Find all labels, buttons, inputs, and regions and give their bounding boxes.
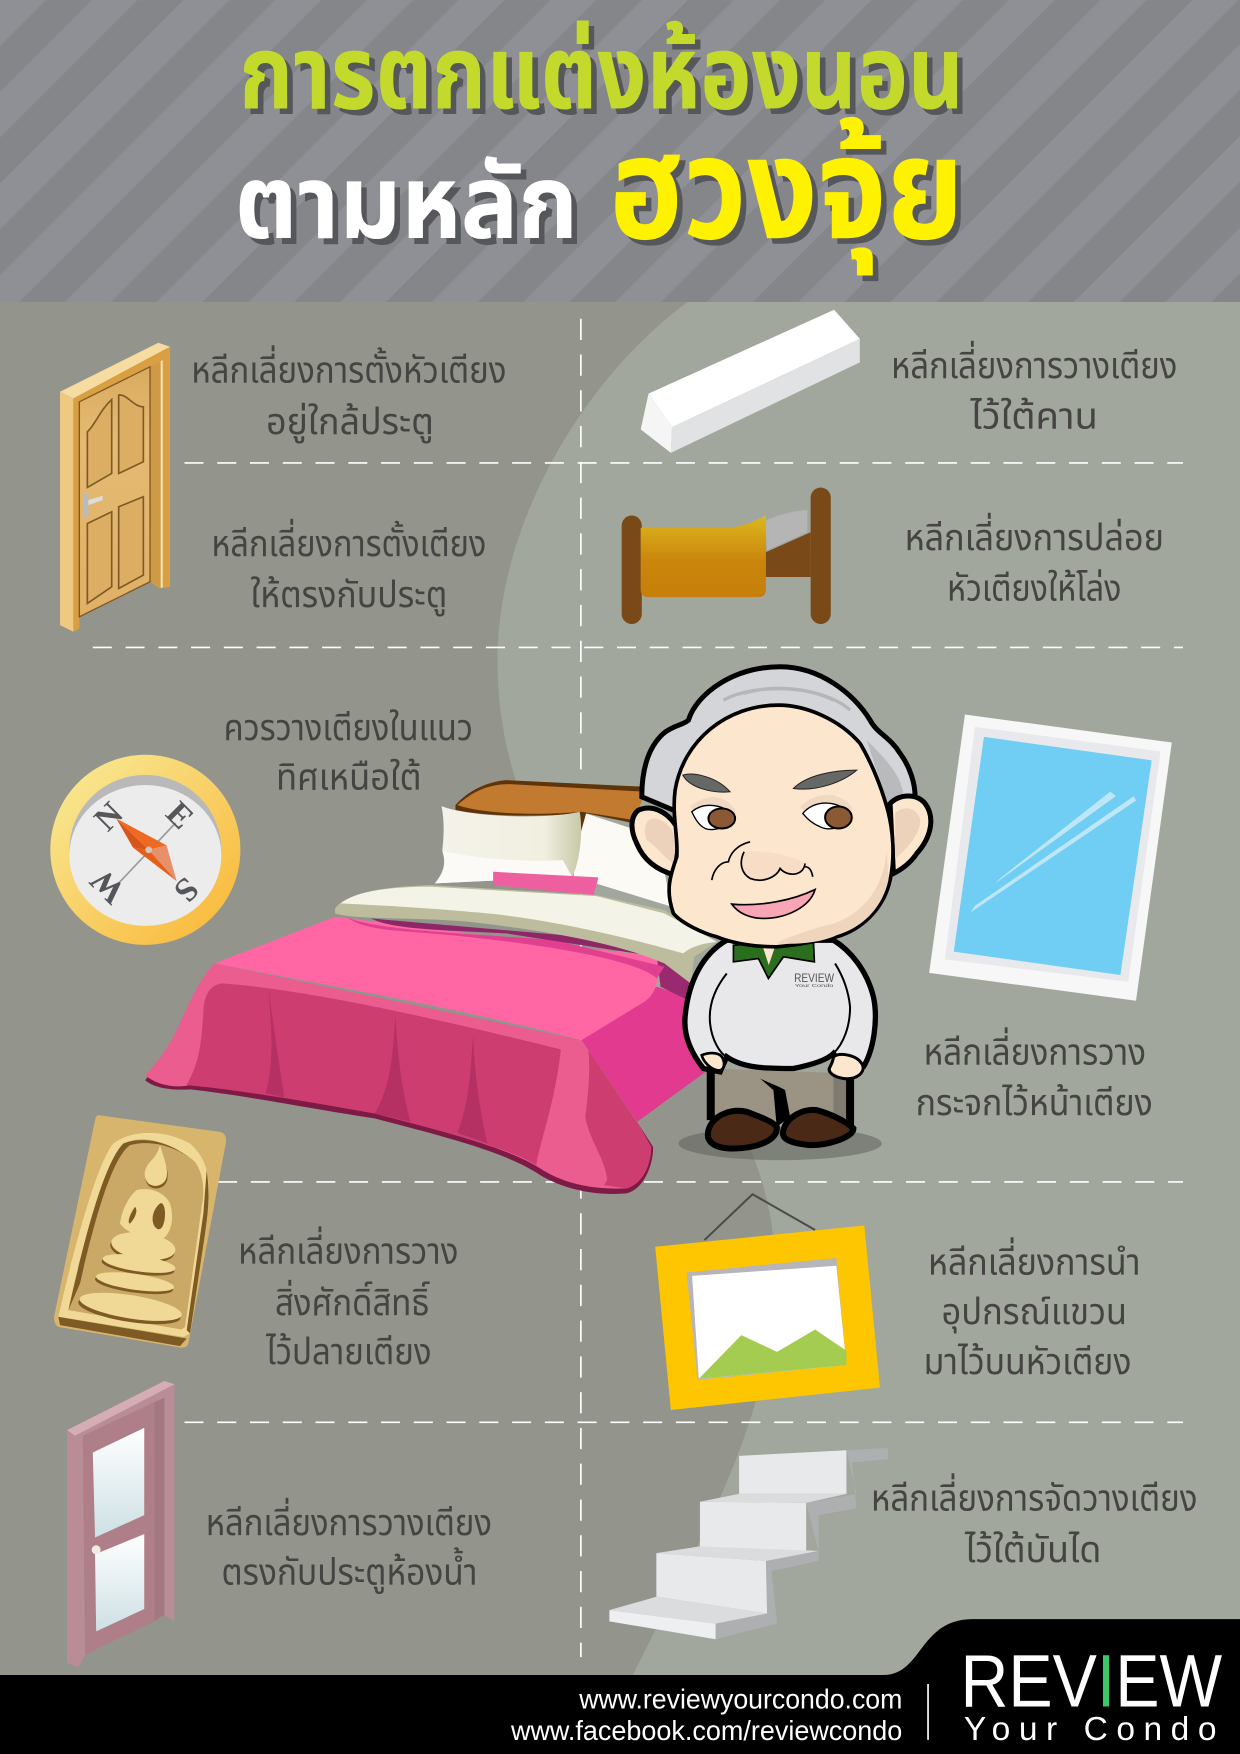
eyes: [690, 795, 852, 820]
shirt logo: REVIEW: [794, 971, 835, 985]
text: avoid beam: หลีกเลี่ยงการวางเตียง: [891, 340, 1177, 386]
text: avoid sacred items: สิ่งศักดิ์สิทธิ์: [275, 1279, 430, 1323]
pink cushion: [493, 872, 598, 895]
face: [669, 705, 893, 947]
text: avoid under stairs: หลีกเลี่ยงการจัดวางเตียง: [871, 1473, 1198, 1519]
lower body: [678, 940, 882, 1160]
text: avoid under stairs: [871, 1473, 1198, 1570]
icon: compass: N: [87, 795, 131, 838]
nose: [740, 851, 805, 880]
front drape: [145, 1053, 653, 1194]
pants: [712, 1068, 852, 1127]
hair: [642, 667, 915, 810]
footer bar: [0, 1619, 1240, 1754]
header banner: [0, 0, 1240, 302]
icon: compass: [50, 755, 240, 945]
text: avoid head near door: [191, 344, 507, 444]
ears: [632, 808, 678, 875]
illustration: bed: [145, 780, 717, 1194]
title line 1: การตกแต่งห้องนอน: [239, 16, 964, 131]
text: north-south: ควรวางเตียงในแนว: [224, 707, 473, 748]
text: avoid mirror: หลีกเลี่ยงการวาง: [924, 1027, 1146, 1073]
torso: [685, 940, 875, 1077]
text: avoid head near door: หลีกเลี่ยงการตั้งหัวเตียง: [191, 344, 507, 390]
icon: compass: E: [159, 795, 201, 837]
hands: [702, 1053, 724, 1070]
text: avoid hanging objects: มาไว้บนหัวเตียง: [924, 1341, 1132, 1382]
icon: ceiling beam: [641, 310, 860, 453]
icon: compass: S: [167, 870, 206, 909]
text: avoid mirror: กระจกไว้หน้าเตียง: [916, 1082, 1153, 1123]
icon: hanging picture: [655, 1194, 880, 1410]
icon: wooden door: [60, 343, 170, 632]
text: avoid head near door: อยู่ใกล้ประตู: [266, 401, 434, 444]
text: avoid sacred items: [238, 1226, 458, 1372]
character: feng shui man: [632, 667, 931, 1160]
title line 2: ตามหลัก: [235, 145, 578, 260]
mouth: [732, 889, 815, 918]
text: avoid beam: ไว้ใต้คาน: [969, 395, 1098, 436]
collar: [762, 947, 778, 970]
icon: bed with open headboard: [622, 488, 831, 624]
text: north-south: [224, 707, 473, 797]
website links: [510, 1684, 902, 1746]
text: avoid open headboard: [905, 512, 1164, 608]
logo: Your Condo: [964, 1711, 1217, 1748]
head: [632, 667, 931, 947]
headboard: [455, 780, 645, 858]
shirt logo: Your Condo: [795, 983, 834, 989]
text: avoid open headboard: หลีกเลี่ยงการปล่อย: [905, 512, 1164, 558]
website links: www.reviewyourcondo.com: [578, 1684, 902, 1715]
icon: stairs: [609, 1448, 888, 1639]
website links: www.facebook.com/reviewcondo: [510, 1715, 902, 1746]
logo: REVIEW: [960, 1639, 1222, 1722]
title line 2: ฮวงจุ้ย: [615, 115, 969, 281]
text: avoid mirror: [916, 1027, 1153, 1123]
background panel: [0, 302, 1240, 1677]
text: avoid bathroom door: หลีกเลี่ยงการวางเตียง: [206, 1497, 492, 1543]
pillows: [574, 813, 672, 907]
shadow: [678, 1127, 882, 1160]
text: avoid bed facing door: ให้ตรงกับประตู: [250, 574, 447, 617]
text: avoid hanging objects: [924, 1237, 1140, 1382]
duvet fold: [335, 885, 717, 983]
shoes: [708, 1111, 777, 1148]
icon: mirror: [929, 715, 1172, 1001]
text: avoid hanging objects: อุปกรณ์แขวน: [941, 1291, 1127, 1334]
text: avoid hanging objects: หลีกเลี่ยงการนำ: [928, 1237, 1140, 1283]
bed top: [215, 917, 658, 1040]
text: avoid sacred items: หลีกเลี่ยงการวาง: [238, 1226, 458, 1272]
text: avoid bathroom door: ตรงกับประตูห้องน้ำ: [221, 1546, 477, 1594]
icon: buddha amulet: [54, 1115, 226, 1348]
text: avoid beam: [891, 340, 1177, 436]
title line 2: [235, 109, 969, 281]
icon: bathroom door: [67, 1381, 174, 1667]
text: avoid bathroom door: [206, 1497, 492, 1594]
icon: compass: W: [83, 861, 133, 911]
eyebrows: [683, 774, 730, 792]
title line 2: ฮวงจุ้ย: [609, 109, 964, 275]
text: avoid open headboard: หัวเตียงให้โล่ง: [947, 567, 1121, 608]
title line 2: ตามหลัก: [240, 151, 584, 266]
text: avoid bed facing door: หลีกเลี่ยงการตั้งเตียง: [211, 518, 486, 564]
text: north-south: ทิศเหนือใต้: [276, 756, 422, 797]
title line 1: การตกแต่งห้องนอน: [245, 21, 969, 136]
text: avoid bed facing door: [211, 518, 486, 617]
text: avoid sacred items: ไว้ปลายเตียง: [265, 1331, 432, 1372]
text: avoid under stairs: ไว้ใต้บันได: [964, 1529, 1101, 1570]
bed side: [582, 987, 706, 1122]
shirt logo: [794, 971, 835, 989]
